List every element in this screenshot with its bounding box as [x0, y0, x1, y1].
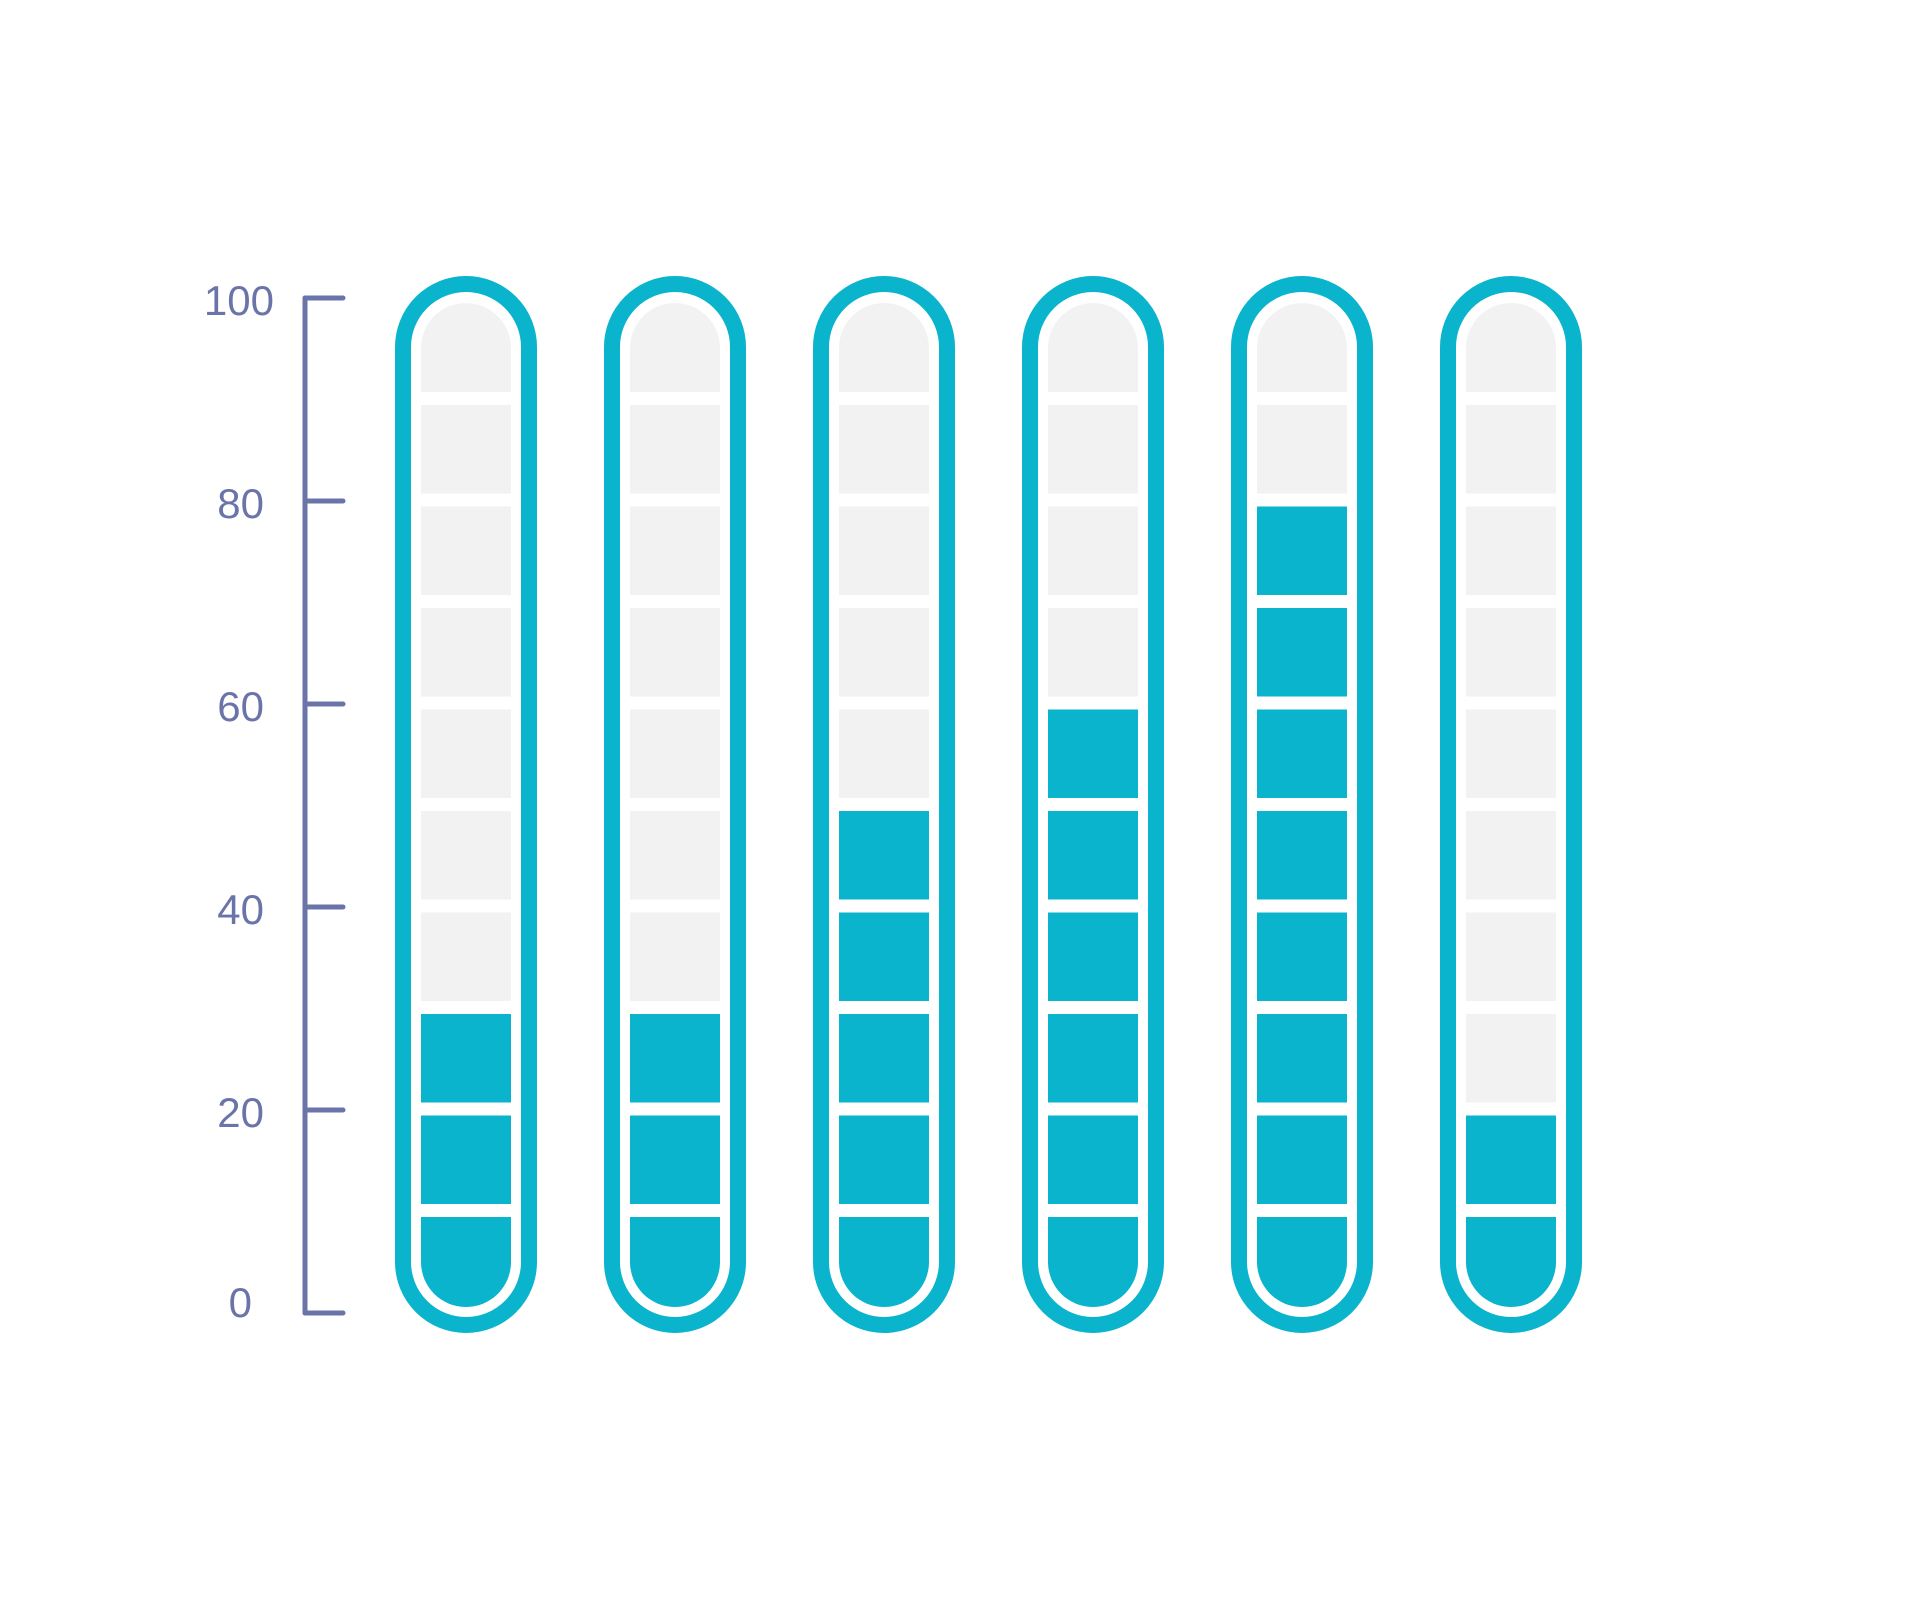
tube 4 (60) — [1030, 284, 1156, 1325]
tube 3 (50) — [821, 284, 947, 1325]
axis labels — [204, 277, 274, 1326]
tube 6 (20) — [1448, 284, 1574, 1325]
axis labels: 40 — [217, 886, 264, 933]
tube 1 (30) — [403, 284, 529, 1325]
axis labels: 20 — [217, 1089, 264, 1136]
tube 2 (30) — [612, 284, 738, 1325]
tube 5 (80) — [1239, 284, 1365, 1325]
axis — [305, 298, 343, 1313]
axis labels: 60 — [217, 683, 264, 730]
axis labels: 0 — [229, 1279, 252, 1326]
axis labels: 100 — [204, 277, 274, 324]
axis labels: 80 — [217, 480, 264, 527]
